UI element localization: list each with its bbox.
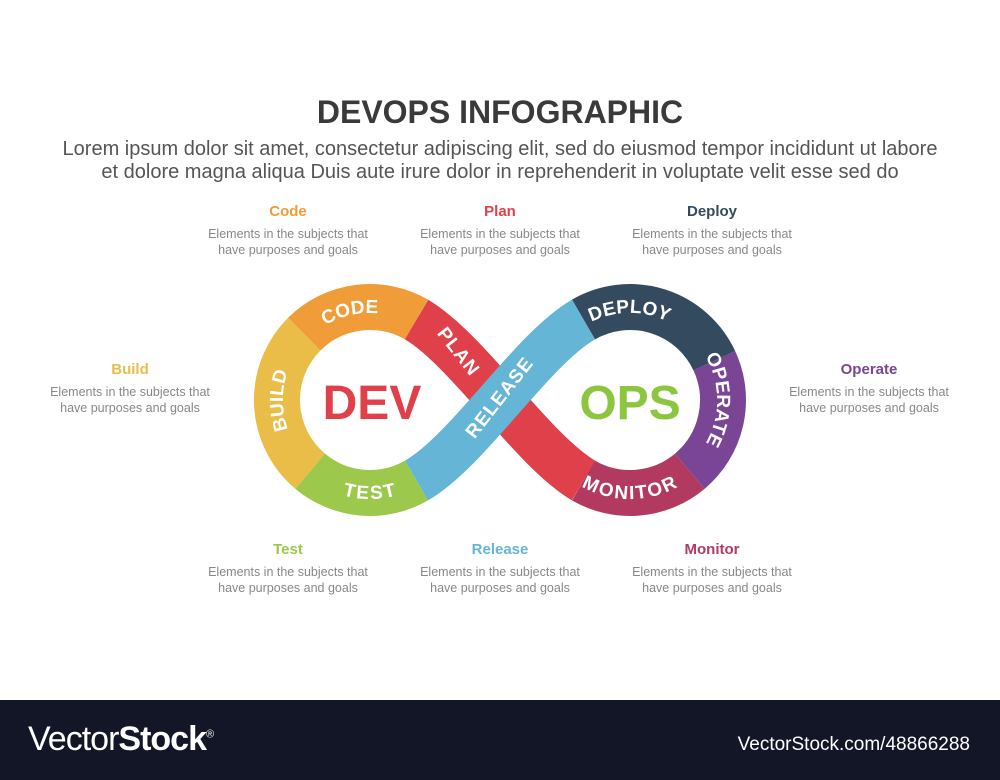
infinity diagram: MONITOR [582, 475, 678, 500]
label: build: Elements in the subjects that [50, 385, 210, 399]
infinity diagram: CODE [322, 300, 378, 323]
infinity diagram: DEPLOY [588, 300, 672, 322]
label: code: have purposes and goals [218, 243, 358, 257]
infinity diagram: RELEASE [462, 353, 538, 443]
label: release: Elements in the subjects that [420, 565, 580, 579]
label: plan: have purposes and goals [430, 243, 570, 257]
label: release: Release [472, 541, 528, 558]
label: test: have purposes and goals [218, 581, 358, 595]
label: operate: Elements in the subjects that [789, 385, 949, 399]
label: code: Code [269, 203, 307, 220]
infinity diagram: OPERATE [706, 352, 730, 448]
label: deploy: have purposes and goals [642, 243, 782, 257]
label: monitor: Monitor [684, 541, 739, 558]
label: plan: Elements in the subjects that [420, 227, 580, 241]
infinity diagram: BUILD [270, 370, 288, 432]
label: operate: have purposes and goals [799, 401, 939, 415]
subtitle [63, 138, 937, 183]
label: release [420, 541, 580, 595]
label: deploy [632, 203, 792, 257]
label: code [208, 203, 368, 257]
infinity diagram: DEV [323, 377, 421, 430]
label: monitor: have purposes and goals [642, 581, 782, 595]
label: operate: Operate [841, 361, 897, 378]
subtitle: et dolore magna aliqua Duis aute irure dolor in reprehenderit in voluptate velit esse sed do [101, 161, 899, 183]
label: test: Test [273, 541, 303, 558]
label: monitor [632, 541, 792, 595]
label: plan: Plan [484, 203, 516, 220]
label: code: Elements in the subjects that [208, 227, 368, 241]
infinity diagram: PLAN [433, 324, 483, 380]
infinity diagram: OPS [579, 377, 681, 430]
subtitle: Lorem ipsum dolor sit amet, consectetur adipiscing elit, sed do eiusmod tempor incididunt ut labore [63, 138, 937, 160]
label: test [208, 541, 368, 595]
label: build: have purposes and goals [60, 401, 200, 415]
label: build: Build [111, 361, 149, 378]
label: test: Elements in the subjects that [208, 565, 368, 579]
title: DEVOPS INFOGRAPHIC [317, 94, 683, 130]
label: deploy: Elements in the subjects that [632, 227, 792, 241]
footer [0, 700, 1000, 780]
label: release: have purposes and goals [430, 581, 570, 595]
label: build [50, 361, 210, 415]
label: deploy: Deploy [687, 203, 737, 220]
infinity diagram: TEST [345, 482, 394, 500]
label: operate [789, 361, 949, 415]
label: monitor: Elements in the subjects that [632, 565, 792, 579]
label: plan [420, 203, 580, 257]
footer: VectorStock.com/48866288 [738, 734, 970, 755]
footer: VectorStock® [28, 720, 213, 758]
